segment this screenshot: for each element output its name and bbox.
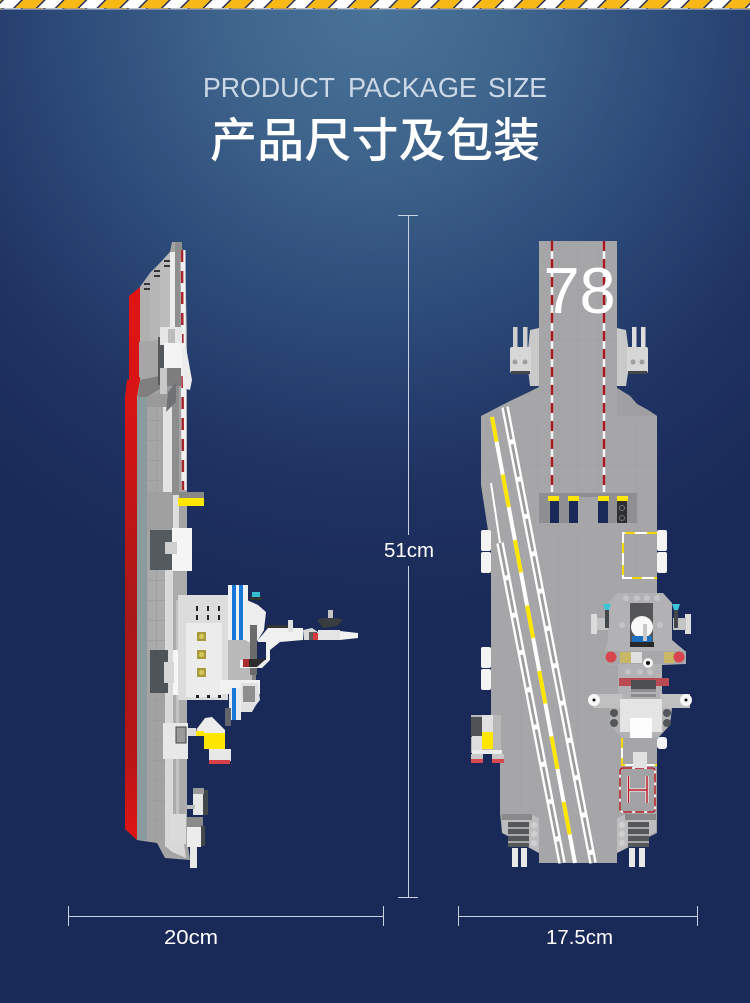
lift platform with yellow panel: [163, 717, 231, 764]
dimension: width 20cm: 20cm: [164, 927, 218, 949]
helipad H: [620, 768, 655, 812]
red hull side: [125, 287, 140, 840]
radar bar: [605, 651, 686, 664]
dimension: height 51cm: [384, 215, 434, 898]
island top view: [588, 593, 692, 768]
cyan lights: [603, 604, 611, 610]
yellow parking outlines: [622, 533, 657, 765]
blue striped stacks: [228, 585, 248, 641]
island hull outline: [605, 593, 685, 738]
heading: English title: PACKAGE: [348, 72, 477, 103]
hazard stripe top border: [0, 0, 750, 10]
top view of aircraft carrier model: [471, 241, 692, 867]
top studs: [619, 595, 663, 675]
dimension: width 17.5cm: 17.5cm: [546, 927, 613, 949]
side wing lights: [593, 694, 623, 708]
heading: Chinese title: 产品尺寸及包装: [210, 114, 540, 167]
flight deck edge markings: [183, 250, 184, 490]
dark stud pairs: [610, 709, 671, 727]
side rails: [591, 614, 597, 634]
hull bands: [137, 242, 187, 858]
dimension: width 17.5cm: [458, 906, 698, 949]
island superstructure: [178, 585, 303, 726]
aft guns: [170, 788, 208, 868]
heading: English title: [203, 72, 547, 103]
deck panel lines: [481, 241, 657, 860]
hull number 78: 78: [544, 254, 616, 327]
white deckhouse: [620, 699, 662, 732]
side view of aircraft carrier model: [125, 242, 358, 868]
grey hull: [137, 242, 190, 860]
heading: English title: SIZE: [488, 72, 547, 103]
dimension: width 20cm: [68, 906, 384, 949]
forward sponson: [158, 327, 192, 412]
side lift: [471, 715, 504, 763]
forward runway lines: [552, 241, 604, 492]
yellow radar panels: [197, 632, 206, 677]
flight deck: [481, 241, 657, 863]
angled deck lines: [491, 407, 593, 863]
white sponson blocks: [150, 528, 192, 571]
dimension: height 51cm: 51cm: [384, 540, 434, 562]
aft gun mounts: [502, 814, 656, 867]
side white blocks: [481, 530, 667, 690]
forward gun mounts: [510, 327, 648, 386]
heading: English title: PRODUCT: [203, 72, 335, 103]
yellow catapult block: [178, 492, 204, 506]
elevator bays: [539, 493, 637, 523]
mast arm and radar dish: [267, 610, 358, 640]
funnel: [630, 603, 653, 642]
